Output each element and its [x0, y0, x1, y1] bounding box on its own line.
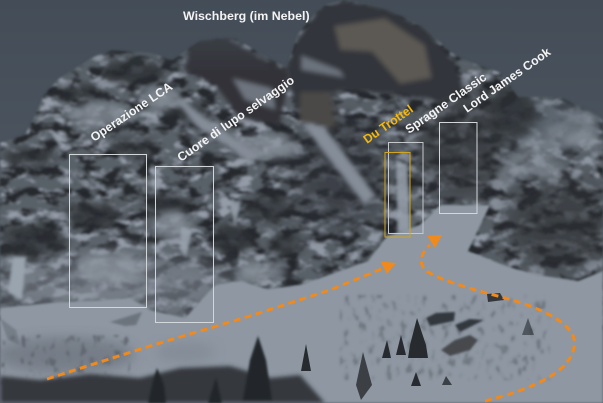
label: Du Trottel: Du Trottel [361, 102, 416, 146]
snow slope [0, 205, 603, 403]
ice falls on the wall [8, 160, 410, 300]
route rectangle: Du Trottel [385, 152, 410, 237]
upper summit rock face [185, 0, 462, 128]
bare trees scattered on the slope [0, 295, 550, 385]
icon: conifer [148, 368, 166, 403]
label: Operazione LCA: Operazione LCA [88, 79, 175, 144]
fog fading the left silhouette [94, 38, 254, 60]
small boulders on the slope [0, 312, 142, 345]
route rectangle: Cuore di lupo selvaggio [156, 166, 214, 322]
forest at lower left [0, 336, 325, 403]
large tonal zones [0, 90, 603, 315]
dark rock bands on the left wall [0, 59, 537, 259]
heading: Wischberg: Wischberg (im Nebel) [183, 9, 310, 23]
dashed approach arrow to the left routes [47, 262, 396, 379]
route rectangle: Spragne Classic [388, 142, 423, 234]
dark rocks on slope [426, 293, 504, 356]
route rectangle: Lord James Cook [440, 122, 477, 214]
dashed approach arrow curving to the right routes [421, 235, 575, 401]
conifers on right slope [301, 318, 534, 400]
icon: conifer [243, 336, 272, 400]
snow ledges [165, 55, 598, 205]
label: Cuore di lupo selvaggio: Cuore di lupo selvaggio [175, 73, 297, 164]
icon: conifer [208, 378, 222, 403]
label: Lord James Cook: Lord James Cook [461, 45, 553, 115]
route rectangle: Operazione LCA [70, 154, 146, 308]
label: Spragne Classic: Spragne Classic [403, 70, 489, 136]
light snow-covered zones on the left wall [68, 88, 599, 284]
